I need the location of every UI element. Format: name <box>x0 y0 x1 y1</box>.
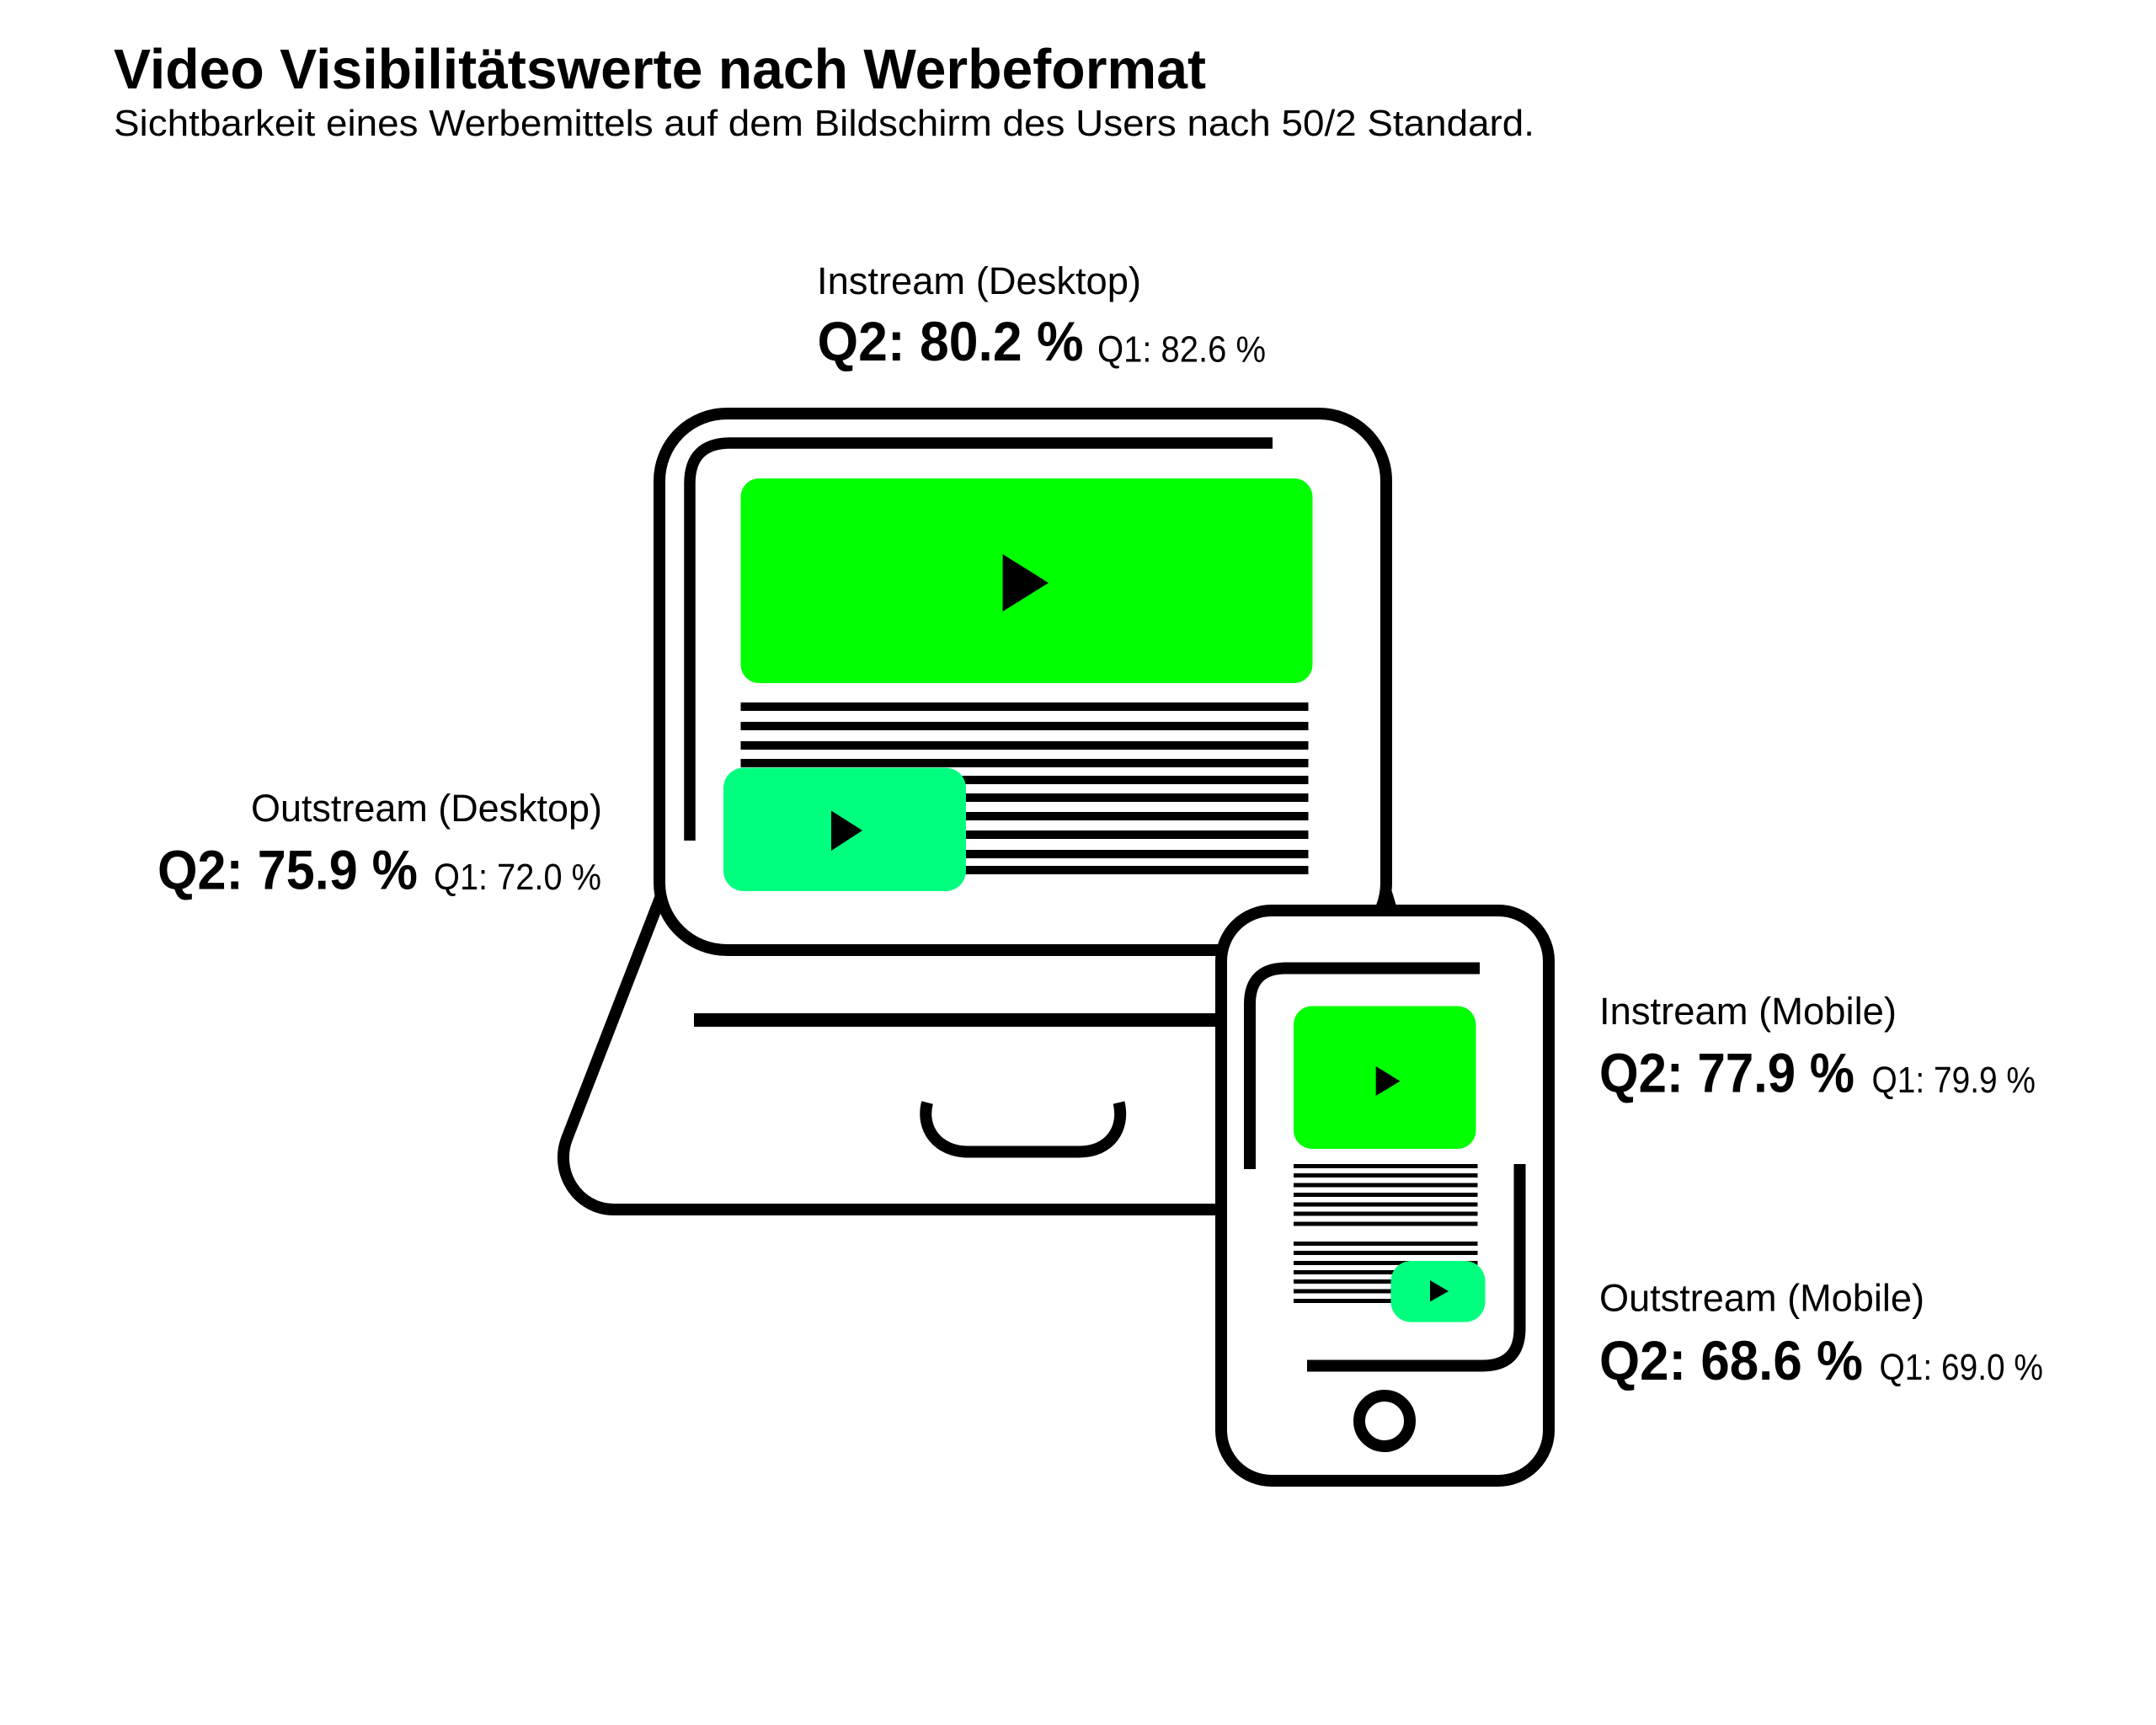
label: instream desktop: Q1: 82.6 % <box>1097 328 1266 371</box>
label: outstream mobile: Q1: 69.0 % <box>1880 1347 2043 1388</box>
laptop inner bezel line <box>690 443 1273 841</box>
outstream mobile video <box>1391 1261 1486 1322</box>
label: instream desktop <box>817 259 1266 372</box>
title: Video Visibilitätswerte nach Werbeformat <box>114 38 1206 101</box>
laptop screen frame <box>659 414 1386 950</box>
label: outstream mobile: Outstream (Mobile) <box>1599 1277 1924 1319</box>
label: outstream desktop: Outstream (Desktop) <box>251 787 602 830</box>
laptop base <box>563 893 1391 1210</box>
label: instream mobile: Q2: 77.9 % <box>1599 1041 1854 1103</box>
keyboard bar <box>694 1013 1233 1027</box>
desktop text lines <box>741 702 1309 874</box>
label: instream mobile: Q1: 79.9 % <box>1871 1060 2036 1101</box>
phone illustration <box>1221 911 1549 1481</box>
phone inner line top <box>1250 969 1480 1169</box>
label: outstream desktop <box>157 787 602 901</box>
label: outstream mobile <box>1599 1277 2043 1391</box>
laptop illustration <box>563 414 1391 1210</box>
icon: play <box>1430 1280 1449 1301</box>
mobile text lines <box>1294 1164 1477 1303</box>
phone body <box>1221 911 1549 1481</box>
label: outstream desktop: Q2: 75.9 % <box>157 839 418 901</box>
trackpad <box>926 1103 1120 1152</box>
outstream desktop video <box>723 768 966 891</box>
label: instream desktop: Q2: 80.2 % <box>817 310 1083 372</box>
label: instream mobile <box>1599 990 2036 1103</box>
icon: play <box>1003 554 1049 611</box>
instream mobile video <box>1294 1006 1476 1149</box>
instream desktop video <box>741 478 1312 683</box>
label: instream desktop: Instream (Desktop) <box>817 259 1141 302</box>
label: outstream mobile: Q2: 68.6 % <box>1599 1329 1863 1391</box>
label: outstream desktop: Q1: 72.0 % <box>434 857 601 898</box>
subtitle: Sichtbarkeit eines Werbemittels auf dem Bildschirm des Users nach 50/2 Standard. <box>114 103 1534 144</box>
icon: play <box>831 810 862 851</box>
icon: play <box>1376 1066 1400 1096</box>
phone home button <box>1359 1396 1410 1446</box>
phone inner line bottom <box>1307 1164 1519 1366</box>
label: instream mobile: Instream (Mobile) <box>1599 990 1897 1033</box>
